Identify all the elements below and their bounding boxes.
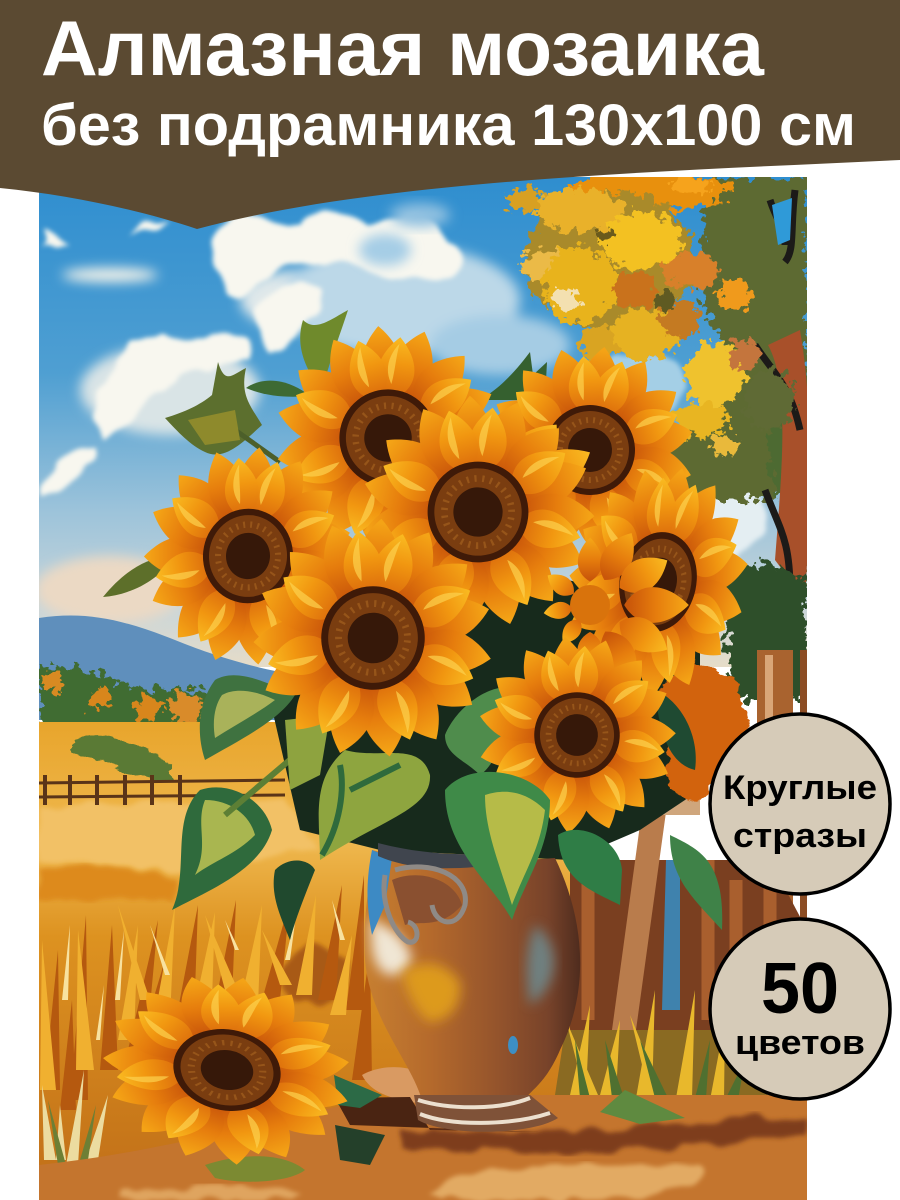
- hedge on the hill: [72, 736, 172, 782]
- bud top left: [165, 362, 280, 462]
- vase handle inner: [392, 875, 462, 925]
- sunflower lower right: [466, 625, 689, 847]
- foreground leaves: [205, 1075, 385, 1182]
- slanted plank: [612, 810, 666, 1030]
- right grass tufts: [555, 990, 770, 1100]
- orange band of the field: [39, 866, 180, 900]
- badge number: 50: [761, 949, 839, 1029]
- sky opening, lower right: [610, 352, 770, 556]
- vase body: [364, 850, 580, 1100]
- leaves over the vase: [445, 772, 722, 930]
- vase blue stripe: [368, 850, 392, 935]
- sunflower behind, lower right: [655, 660, 750, 800]
- vase base: [414, 1095, 558, 1132]
- dark grass blades: [44, 875, 372, 1110]
- yellow grass blades: [40, 895, 352, 1090]
- top rail: [662, 799, 700, 815]
- grass shadow: [281, 945, 349, 1005]
- dark leaves top right: [480, 352, 547, 400]
- leaf right of vase: [558, 830, 622, 905]
- ground light strokes: [430, 1165, 704, 1200]
- sunflower centre: [352, 388, 604, 638]
- sky gap in tree: [772, 198, 792, 245]
- badge text line one: Круглые: [723, 769, 877, 807]
- badge caption: цветов: [735, 1024, 865, 1062]
- fence posts: [757, 650, 793, 930]
- wheat field: [39, 722, 570, 1165]
- leaf far right: [670, 835, 722, 930]
- long petals overlapping the flower behind: [511, 435, 600, 507]
- stem leaves: [103, 310, 547, 940]
- vase handle: [384, 867, 465, 942]
- clouds: [35, 203, 570, 624]
- fallen sunflower: [86, 956, 368, 1186]
- dark green mass behind bouquet: [270, 560, 700, 860]
- light field band: [39, 800, 320, 872]
- badge circle: [710, 919, 890, 1099]
- leaf highlight: [195, 800, 255, 875]
- small leaf: [246, 381, 310, 397]
- leaf dark under fallen flower: [335, 1125, 385, 1165]
- lower left pale grass: [42, 1070, 108, 1165]
- header banner: [0, 0, 900, 229]
- small side flower: [542, 525, 689, 690]
- leaf upper: [445, 687, 515, 775]
- leaf centre left: [319, 750, 430, 860]
- fence plank stripes: [588, 860, 770, 1020]
- fence lower planks: [570, 860, 807, 1035]
- sunflower top: [265, 316, 511, 562]
- leaf centre large: [445, 772, 550, 920]
- vase yellow patch: [402, 964, 460, 1022]
- trunk dark branches: [755, 190, 800, 590]
- cream grass blades: [62, 900, 345, 1040]
- vase grey reflection: [527, 925, 554, 1005]
- yellow foliage: [507, 170, 796, 455]
- badge: 50 colours: [710, 919, 890, 1099]
- field fence: [39, 775, 285, 805]
- ground dark shadow: [335, 1097, 540, 1132]
- background tree on the right: [507, 170, 812, 700]
- subtitle: без подрамника 130х100 см: [41, 93, 856, 158]
- leaf stem: [225, 730, 325, 815]
- blue plank: [662, 860, 680, 1010]
- panel: sunflower painting: [35, 170, 812, 1200]
- olive tree canopy: [670, 177, 807, 585]
- leaf fold: [285, 715, 330, 790]
- vase blue dot: [508, 1036, 518, 1054]
- small dark leaf: [274, 861, 315, 940]
- badge: round rhinestones: [710, 714, 890, 894]
- leaf right of fallen flower: [334, 1075, 382, 1108]
- leaf mid left highlight: [214, 691, 275, 738]
- mountains: [39, 615, 280, 720]
- vase cream highlight: [370, 918, 411, 975]
- sky: [39, 177, 807, 667]
- sunflower left: [132, 436, 364, 677]
- badge circle: [710, 714, 890, 894]
- foreground ground: [39, 1095, 807, 1200]
- ground red shadow: [400, 1115, 807, 1152]
- title: Алмазная мозаика: [41, 4, 765, 92]
- far left leaf: [103, 558, 172, 597]
- wooden fence: [570, 650, 807, 1035]
- leaf mid left: [200, 675, 295, 760]
- ground small green plant: [600, 1090, 685, 1124]
- leaf left of vase: [172, 787, 272, 910]
- top leaf: [300, 310, 348, 390]
- vase ground light patch: [362, 1067, 420, 1103]
- trunk: [768, 330, 807, 584]
- sunflower right: [546, 449, 770, 716]
- distant tree line: [39, 662, 207, 722]
- badge text line two: стразы: [733, 817, 867, 855]
- vase neck: [378, 843, 520, 868]
- leaf large highlight: [485, 792, 545, 905]
- ground light left: [120, 1185, 300, 1200]
- lower right shrubs: [725, 563, 807, 700]
- dark leaf over flower: [655, 690, 696, 770]
- tuft base: [555, 1030, 770, 1100]
- golden grass: [40, 875, 372, 1110]
- vase: [364, 843, 580, 1132]
- sunflower front large: [244, 510, 502, 768]
- banner shape: [0, 0, 900, 229]
- vase base rings: [418, 1098, 550, 1123]
- green blades: [575, 1040, 742, 1095]
- sunflower upper right: [471, 332, 709, 569]
- yellow blades: [566, 990, 725, 1100]
- leaf centre left dark vein: [322, 765, 400, 855]
